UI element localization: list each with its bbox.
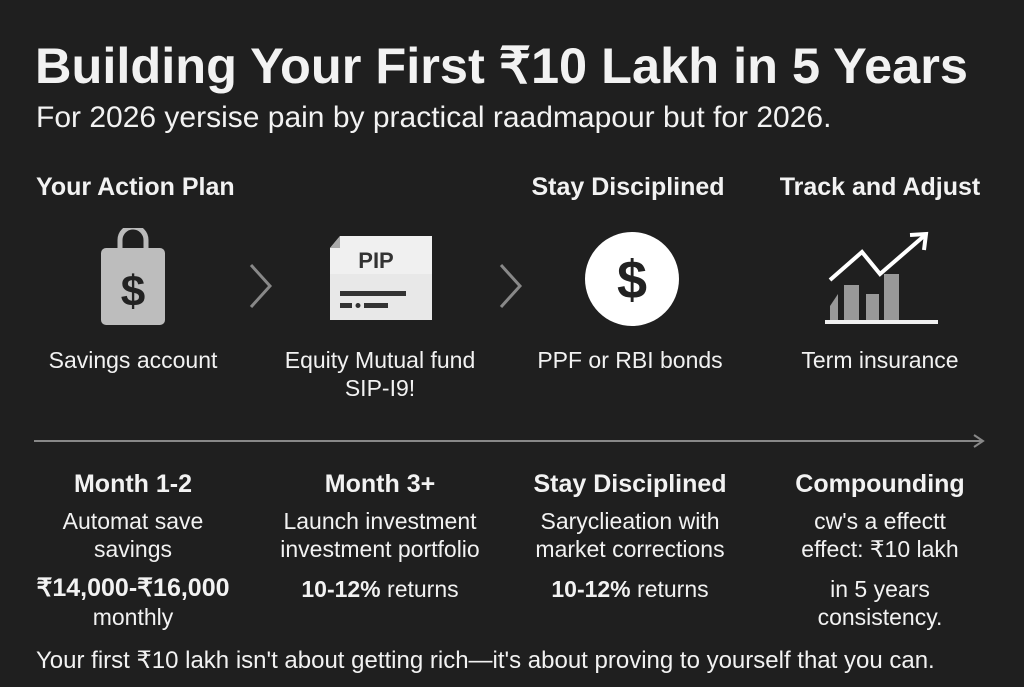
timeline arrow <box>34 434 985 448</box>
label: equity mutual fund: Equity Mutual fund <box>285 347 475 373</box>
footer quote: Your first ₹10 lakh isn't about getting rich—it's about proving to yourself that you can. <box>36 647 935 674</box>
step: month 3+: investment portfolio <box>280 536 480 562</box>
step: month 1-2: savings <box>94 536 172 562</box>
step: stay disciplined: Saryclieation with <box>541 508 719 534</box>
step: stay disciplined: 10-12% returns <box>551 576 709 602</box>
step: month 1-2: monthly <box>93 604 173 630</box>
step: month 3+: 10-12% returns <box>301 576 459 602</box>
label: equity mutual fund <box>285 347 475 401</box>
step: month 1-2: ₹14,000-₹16,000 <box>36 574 230 602</box>
step: compounding: effect: ₹10 lakh <box>801 536 959 562</box>
label: PPF: PPF or RBI bonds <box>537 347 723 373</box>
icon: savings bag: $ <box>121 267 145 316</box>
arrow chevron 2 <box>500 264 522 308</box>
step: compounding <box>795 470 965 630</box>
step: compounding: Compounding <box>795 470 965 498</box>
heading: action plan: Your Action Plan <box>36 173 235 201</box>
icon: PIP document: PIP <box>358 248 394 273</box>
step: month 3+: Launch investment <box>283 508 477 534</box>
step: month 1-2 <box>36 470 230 630</box>
icon: dollar coin <box>585 232 679 326</box>
step: stay disciplined: Stay Disciplined <box>533 470 727 498</box>
step: month 1-2: Month 1-2 <box>74 470 192 498</box>
title: Building Your First ₹10 Lakh in 5 Years <box>35 37 968 94</box>
step: stay disciplined: market corrections <box>535 536 725 562</box>
icon: savings bag <box>101 228 165 325</box>
subtitle: For 2026 yersise pain by practical raadmapour but for 2026. <box>36 101 831 134</box>
label: term insurance: Term insurance <box>801 347 959 373</box>
icon: PIP document <box>330 236 432 320</box>
step: compounding: in 5 years <box>830 576 930 602</box>
step: compounding: cw's a effectt <box>814 508 946 534</box>
step: month 3+: Month 3+ <box>325 470 435 498</box>
step: month 1-2: Automat save <box>63 508 203 534</box>
arrow chevron 1 <box>250 264 272 308</box>
heading: stay disciplined: Stay Disciplined <box>531 173 725 201</box>
label: equity mutual fund: SIP-I9! <box>345 375 415 401</box>
step: month 3+ <box>280 470 480 602</box>
step: compounding: consistency. <box>818 604 942 630</box>
heading: track and adjust: Track and Adjust <box>780 173 980 201</box>
label: savings account: Savings account <box>49 347 217 373</box>
icon: dollar coin: $ <box>617 250 647 310</box>
step: stay disciplined <box>533 470 727 602</box>
icon: growth chart <box>825 232 938 324</box>
